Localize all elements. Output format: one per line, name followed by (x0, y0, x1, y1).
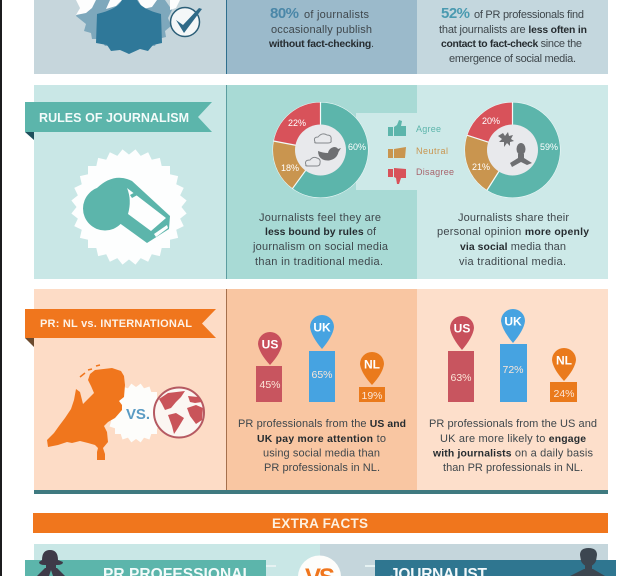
icon: journalist person (570, 548, 605, 576)
text: 52% of PR professionals: of PR professionals find (474, 9, 584, 21)
panel: rules of journalism row (25, 85, 608, 279)
text: 80% of journalists: without fact-checking. (268, 38, 374, 50)
chart: donut personal opinion: 20% (482, 116, 500, 126)
bar: NL 19%: 19% (361, 390, 383, 402)
icon: thumbs down (388, 168, 406, 184)
ribbon: journalist (375, 560, 616, 576)
bar: UK 65%: UK (313, 320, 331, 334)
text: pay more attention: PR professionals from the US and (238, 418, 406, 430)
bar: US 45%: 45% (259, 379, 281, 391)
icon: globe (154, 388, 204, 438)
panel: PR NL vs international row (25, 289, 608, 494)
heading: extra facts (33, 513, 608, 533)
bar: UK 72%: 72% (502, 364, 524, 376)
text: share personal opinion: via traditional media. (459, 256, 566, 268)
icon: PR professional person (37, 550, 65, 576)
text: 52% of PR professionals: emergence of social media. (449, 53, 576, 65)
text: pay more attention (238, 418, 406, 474)
text: share personal opinion (437, 212, 589, 268)
icon: Netherlands map (47, 365, 125, 460)
icon: thumbs up (388, 120, 406, 136)
bar: US 45%: US (262, 338, 278, 352)
icon: clouds and bird (306, 134, 341, 166)
icon: check circle (170, 8, 202, 36)
text: 52% of PR professionals: that journalists are less often in (439, 24, 587, 36)
chart: donut rules of journalism: 18% (281, 163, 299, 173)
icon: VS badge: VS. (126, 406, 150, 423)
chart: donut rules of journalism: 22% (288, 118, 306, 128)
text: less bound by rules (252, 212, 389, 268)
chart: attention to social media bars (256, 315, 385, 402)
text: 80% of journalists: 80% (270, 5, 299, 22)
text: pay more attention: using social media than (263, 448, 380, 460)
bar: NL 24%: 24% (553, 388, 575, 400)
icon: whistle badge (71, 149, 187, 265)
text: 52% of PR professionals (439, 5, 587, 65)
chart: engage with journalists bars (448, 309, 577, 402)
bar: US 63%: 63% (450, 372, 472, 384)
text: 80% of journalists: occasionally publish (271, 24, 372, 36)
text: 80% of journalists (268, 5, 374, 50)
text: 80% of journalists: of journalists (304, 9, 370, 21)
text: less bound by rules: less bound by rules of (265, 226, 377, 238)
bar: US 45% (256, 332, 282, 402)
panel: PR professional vs journalist (25, 544, 616, 576)
ribbon: PR NL vs international (25, 309, 216, 347)
text: engage with journalists (429, 418, 597, 474)
chart: donut personal opinion: 21% (472, 162, 490, 172)
heading: extra facts: EXTRA FACTS (272, 516, 368, 531)
chart: donut personal opinion: 59% (540, 142, 558, 152)
bar: NL 24% (550, 348, 577, 402)
icon: person with speech burst (498, 132, 532, 167)
text: less bound by rules: Journalists feel they are (259, 212, 381, 224)
text: engage with journalists: PR professionals from the US and (429, 418, 597, 430)
bar: UK 72%: UK (504, 314, 522, 328)
chart: donut personal opinion (464, 102, 560, 198)
ribbon: rules of journalism (25, 102, 212, 140)
legend: agree, neutral, disagree: Neutral (416, 146, 448, 156)
text: engage with journalists: with journalists on a daily basis (432, 448, 594, 460)
text: share personal opinion: Journalists share their (458, 212, 569, 224)
text: engage with journalists: than PR professionals in NL. (443, 462, 583, 474)
chart: donut rules of journalism (272, 102, 368, 198)
legend: agree, neutral, disagree (388, 120, 454, 184)
bar: UK 65%: 65% (311, 369, 333, 381)
bar: UK 72% (500, 309, 527, 402)
text: pay more attention: UK pay more attention to (257, 433, 386, 445)
text: engage with journalists: UK are more likely to engage (440, 433, 586, 445)
ribbon: PR NL vs international: PR: NL vs. INTERNATIONAL (40, 318, 192, 330)
icon: thumb neutral (388, 147, 406, 158)
bar: US 63% (448, 316, 474, 402)
text: less bound by rules: than in traditional media. (255, 256, 383, 268)
icon: VS badge (107, 384, 165, 442)
legend: agree, neutral, disagree: Agree (416, 124, 441, 134)
badge: VS (298, 556, 341, 576)
text: less bound by rules: journalism on social media (252, 241, 389, 253)
text: pay more attention: PR professionals in NL. (264, 462, 380, 474)
text: share personal opinion: personal opinion more openly (437, 226, 589, 238)
bar: NL 24%: NL (556, 354, 572, 368)
bar: NL 19% (359, 352, 385, 402)
bar: UK 65% (309, 315, 335, 402)
bar: US 63%: US (454, 322, 470, 336)
panel: fact-checking row (34, 0, 608, 74)
text: 52% of PR professionals: contact to fact-check since the (441, 38, 582, 50)
legend: agree, neutral, disagree: Disagree (416, 167, 454, 177)
chart: donut rules of journalism: 60% (348, 142, 366, 152)
ribbon: PR professional (25, 560, 266, 576)
icon: fact-check badge with check mark (76, 0, 202, 54)
bar: NL 19%: NL (364, 358, 380, 372)
text: 52% of PR professionals: 52% (441, 5, 470, 22)
ribbon: rules of journalism: RULES OF JOURNALISM (39, 111, 189, 125)
text: share personal opinion: via social media than (460, 241, 566, 253)
